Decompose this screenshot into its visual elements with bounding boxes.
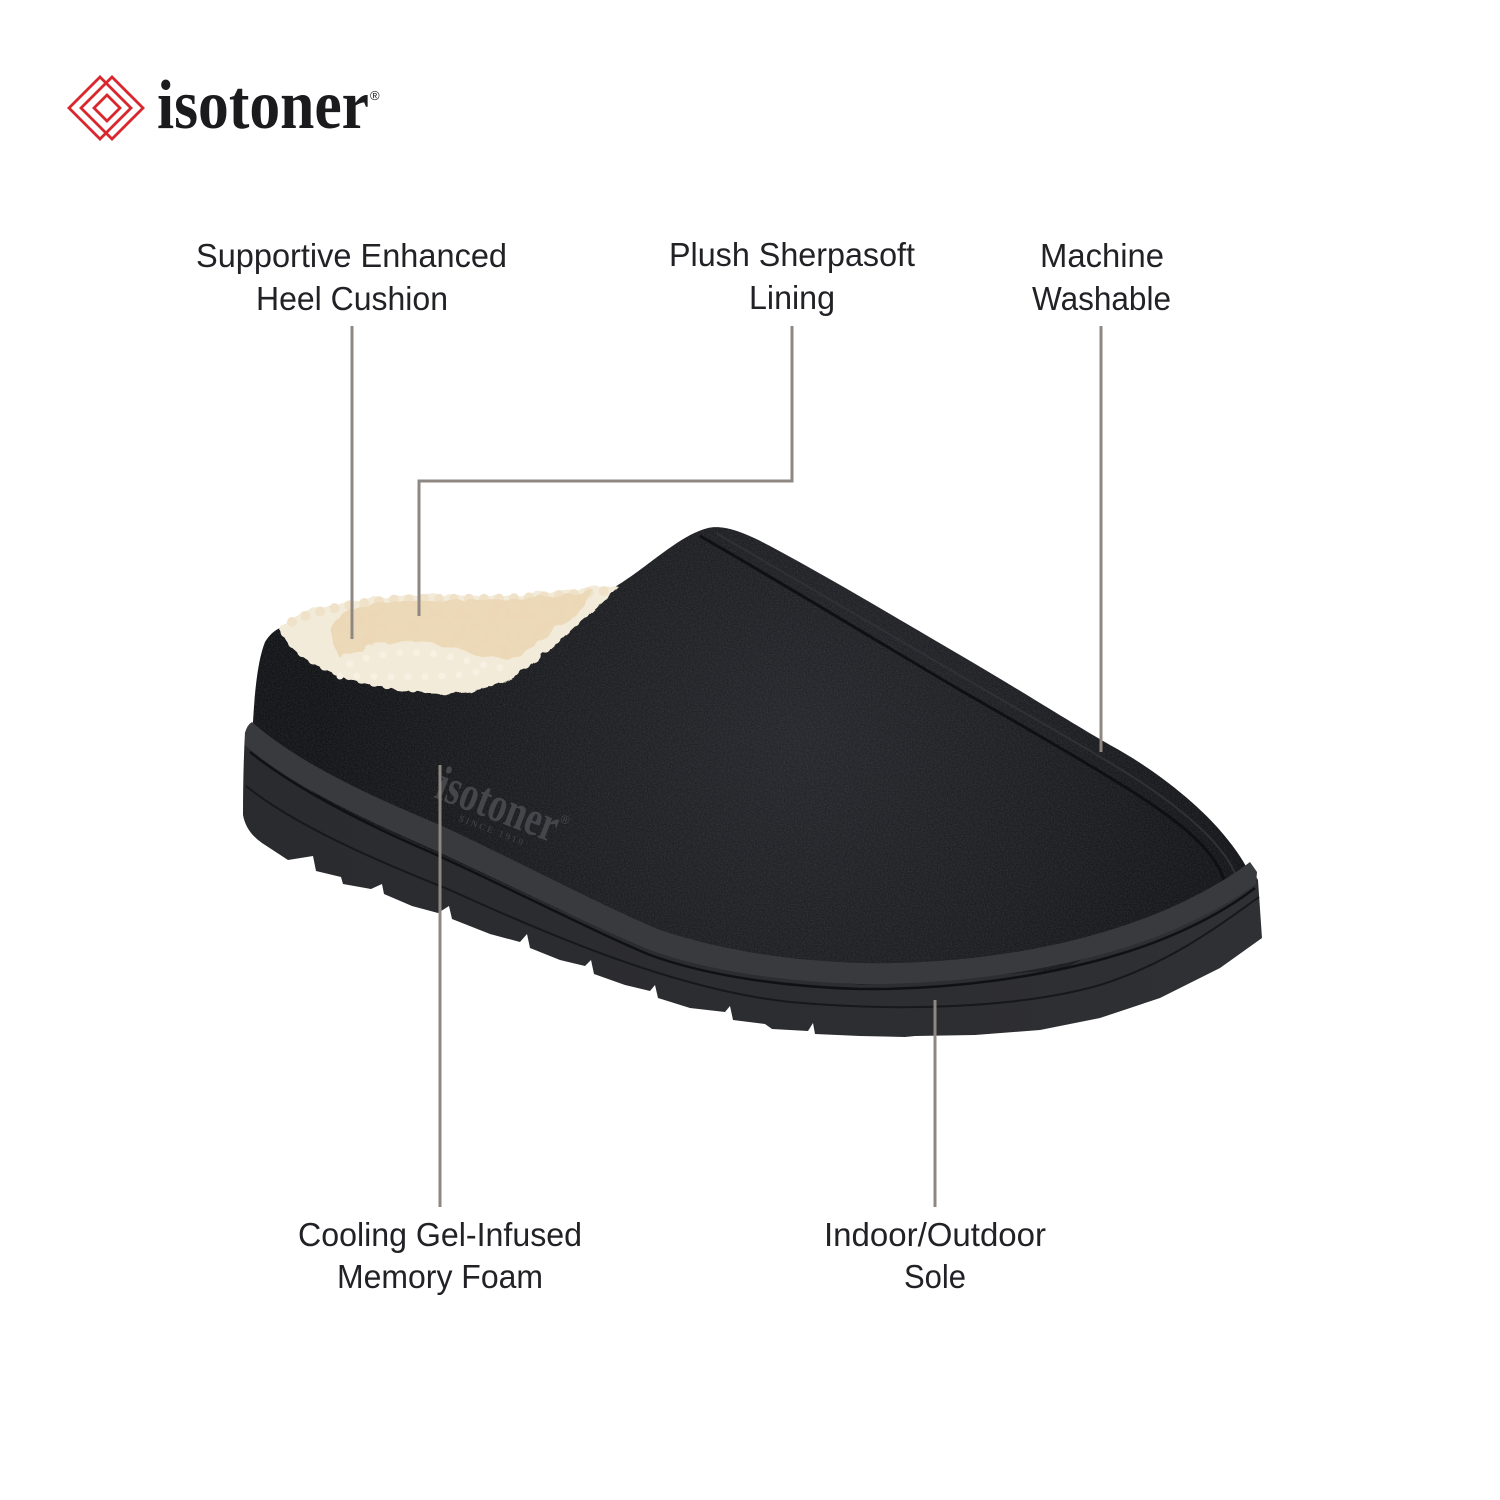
label: indoor/outdoor sole [824,1216,1046,1295]
wordmark: isotoner [157,67,369,144]
sole tread shadow line [246,786,1259,1007]
back collar peek [305,606,332,622]
label: plush sherpasoft lining: Lining [749,279,835,316]
label: cooling gel-infused memory foam: Cooling Gel-Infused [298,1216,582,1253]
logo: isotoner [69,67,380,144]
embossed isotoner logo [428,755,576,860]
upper seam ridge [700,533,1236,880]
line: sherpa lining [419,326,792,616]
sherpa curl texture [340,596,554,658]
label: supportive enhanced heel cushion: Supportive Enhanced [196,237,507,274]
line: machine washable [1100,326,1102,752]
welt stitch shadow [250,752,1255,989]
label: machine washable: Washable [1032,280,1171,317]
line: sole [934,1000,936,1207]
sherpa top bumps [292,591,604,622]
sherpa body [280,586,618,693]
sherpa inner wall shadow [331,592,596,658]
sherpa lining [280,585,618,693]
welt piping [245,722,1257,984]
label: plush sherpasoft lining [669,236,915,316]
label: machine washable [1032,237,1171,317]
sole with treads [243,732,1262,1037]
registered mark: ® [370,88,380,103]
label: indoor/outdoor sole: Sole [904,1258,966,1295]
embossed registered mark: ® [558,812,572,828]
label: cooling gel-infused memory foam [298,1216,582,1295]
sherpa floor bumps [340,652,505,677]
label: plush sherpasoft lining: Plush Sherpasoft [669,236,915,273]
label: machine washable: Machine [1040,237,1164,274]
line: memory foam [438,765,442,1207]
line: heel cushion [350,326,354,639]
label: supportive enhanced heel cushion [196,237,507,317]
slipper illustration [243,527,1262,1037]
suede texture [252,527,1252,985]
slipper upper [252,527,1252,985]
leader lines [352,326,1101,1207]
embossed tagline: SINCE 1910 [457,813,525,847]
icon: red nested diamonds [69,77,143,139]
label: supportive enhanced heel cushion: Heel Cushion [256,280,448,317]
sherpa scalloped edge [286,591,608,688]
label: indoor/outdoor sole: Indoor/Outdoor [824,1216,1046,1253]
label: cooling gel-infused memory foam: Memory Foam [337,1258,543,1295]
embossed wordmark: isotoner [429,755,568,853]
